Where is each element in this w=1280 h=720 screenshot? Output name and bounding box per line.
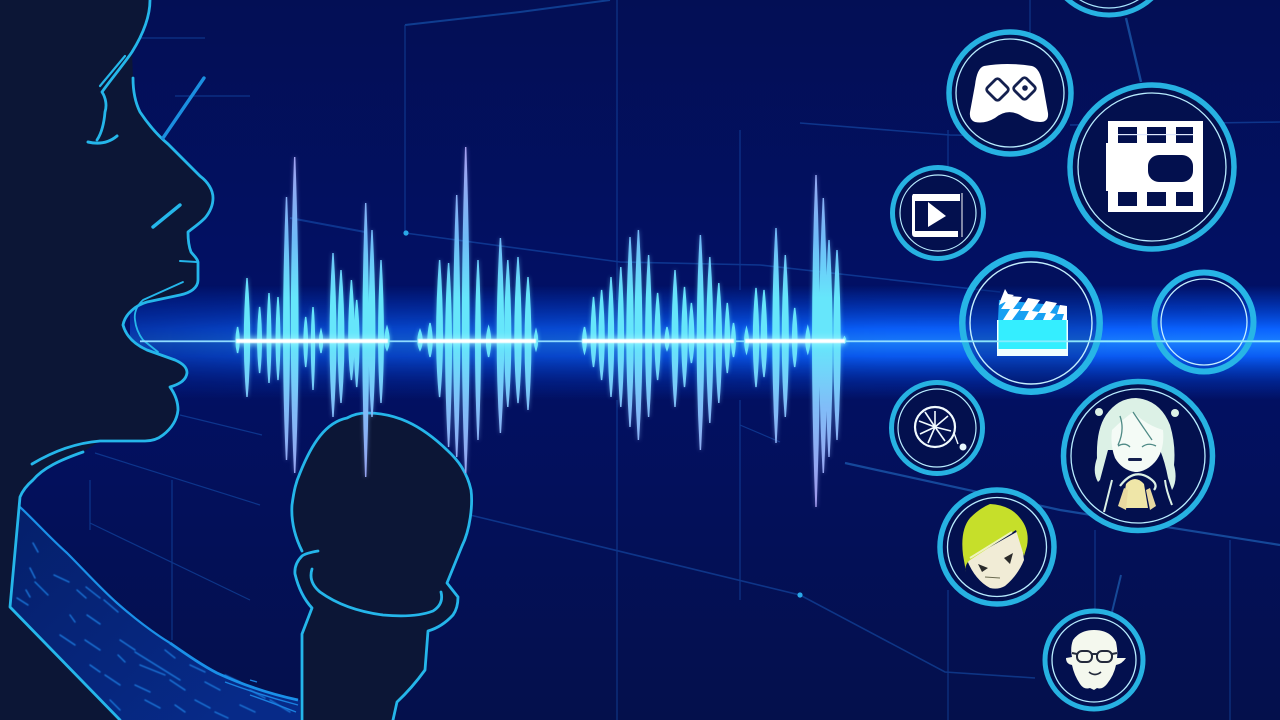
empty circle [1154, 272, 1254, 372]
grid node dots [403, 230, 803, 598]
horizontal light line over circles [960, 340, 1280, 342]
dark speaker silhouette fill [0, 0, 213, 720]
microphone [292, 413, 472, 720]
top partial circle [1046, 0, 1172, 15]
horizontal blue glow band [130, 285, 1280, 400]
forehead light streak [163, 78, 204, 138]
waveform glow [236, 147, 846, 507]
icon: compass [892, 382, 982, 474]
icon: bald man with glasses avatar [1045, 611, 1143, 709]
icon: game controller [949, 32, 1071, 154]
icon: clapperboard [962, 254, 1100, 392]
icon: anime girl avatar [1064, 382, 1212, 530]
audio waveform spikes [236, 147, 846, 507]
icon: green hair avatar [940, 490, 1054, 604]
waveform centre line [140, 340, 1280, 342]
icon: video player [892, 168, 984, 258]
icon: film frame [1070, 85, 1234, 249]
waveform bright core [236, 337, 845, 345]
speaker shoulder textured band [10, 507, 300, 720]
speaker face outline [10, 0, 213, 720]
